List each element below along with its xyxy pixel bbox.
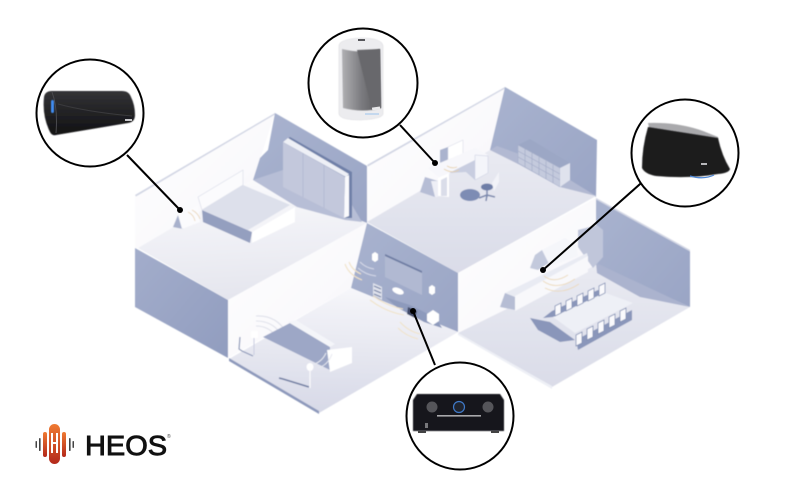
callout: office speaker	[308, 28, 418, 138]
counter	[500, 253, 588, 311]
media shelf	[373, 283, 382, 300]
callout: AV receiver	[406, 362, 514, 470]
floor speaker right	[279, 363, 314, 388]
upper cabinets	[530, 238, 578, 270]
house model	[135, 87, 690, 414]
callout lines	[127, 125, 648, 365]
logo: HEOS	[36, 424, 171, 464]
line: bedroom speaker	[127, 155, 183, 213]
room: office	[367, 87, 597, 273]
wall speakers	[372, 252, 435, 296]
room: kitchen and dining	[458, 198, 690, 389]
dining table and chairs	[530, 283, 633, 350]
shelf unit	[518, 139, 570, 187]
nightstand with speaker	[173, 205, 200, 229]
office chair	[460, 172, 499, 201]
wardrobe	[283, 137, 352, 218]
desk	[420, 140, 488, 197]
sound waves	[256, 262, 420, 339]
line: office speaker	[400, 125, 438, 166]
room: bedroom	[135, 113, 367, 358]
sofa	[263, 320, 352, 372]
TV	[385, 254, 422, 295]
wordmark: HEOS	[85, 430, 167, 461]
line: kitchen speaker	[540, 177, 648, 273]
AV unit and sub	[385, 297, 442, 328]
icon: HEOS sound mark	[36, 424, 74, 464]
line: living room receiver	[410, 308, 435, 365]
bed	[198, 170, 295, 243]
floor speaker left	[239, 331, 258, 356]
callout: kitchen speaker	[632, 100, 738, 206]
room: living room	[228, 223, 458, 414]
registered mark: ®	[167, 433, 171, 440]
tall unit	[578, 225, 603, 268]
callout: bedroom speaker	[36, 60, 144, 166]
